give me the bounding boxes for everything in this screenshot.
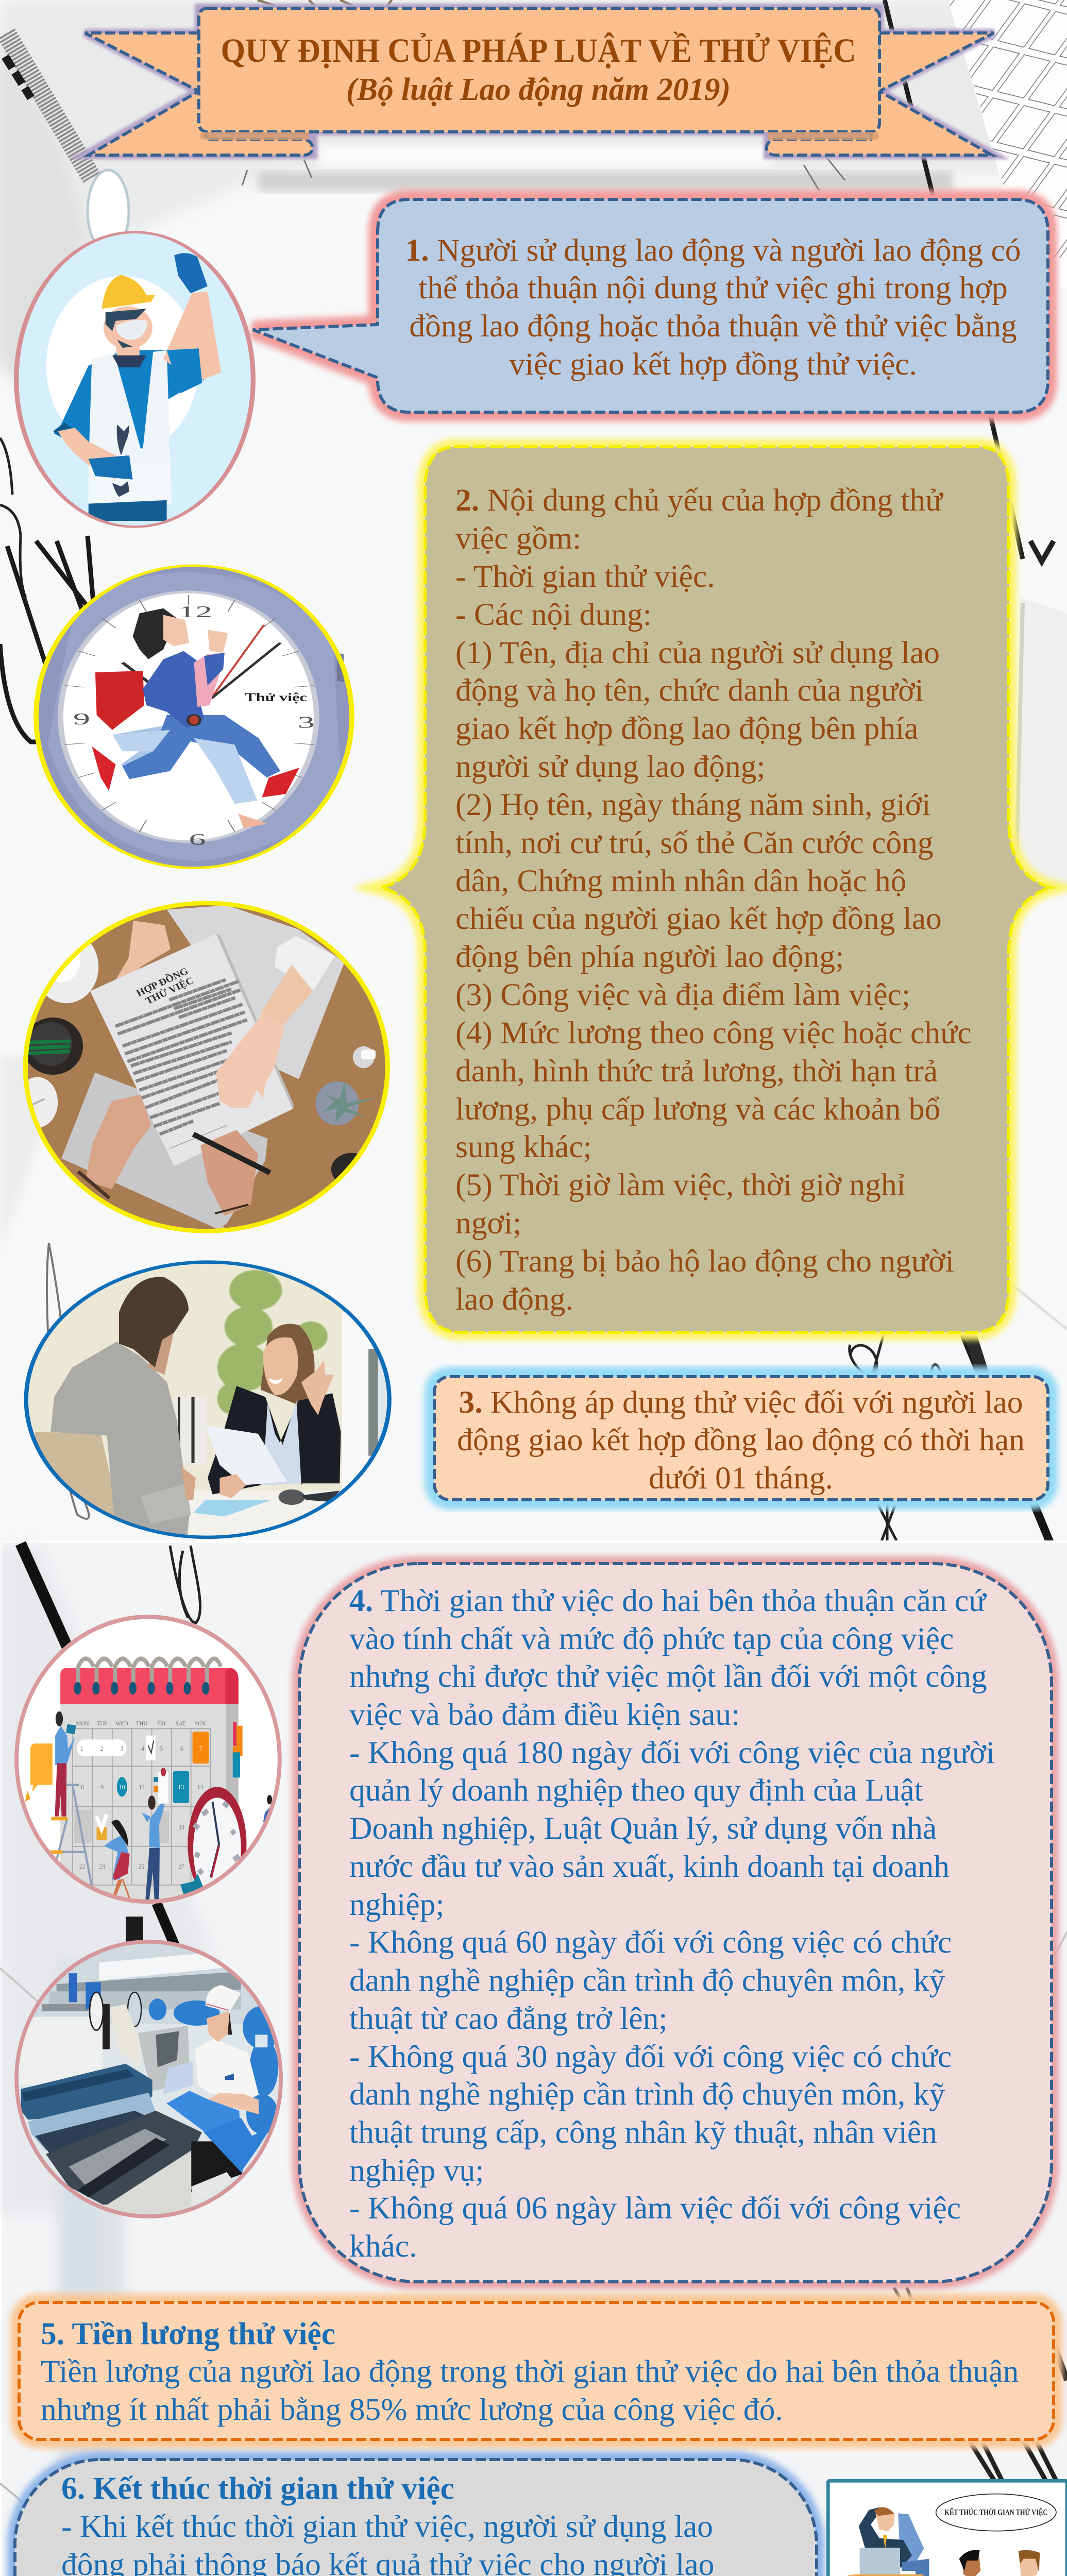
- top hand: [113, 921, 171, 989]
- panel 4 text: 4. Thời gian thử việc do hai bên thỏa thuận căn cứ: [349, 1583, 987, 1618]
- panel 2: contract contents: chiếu của người giao kết hợp đồng lao: [455, 901, 942, 936]
- jacket: [143, 651, 204, 728]
- panel 4: probation period: danh nghề nghiệp cần trình độ chuyên môn, kỹ: [349, 2077, 945, 2112]
- panel 4: probation period: nghiệp vụ;: [349, 2153, 484, 2188]
- panel 2: contract contents: (4) Mức lương theo công việc hoặc chức: [455, 1015, 972, 1050]
- stressed manager: [898, 2513, 924, 2569]
- panel 1: callout: việc giao kết hợp đồng thử việc.: [509, 347, 917, 382]
- mask: [116, 320, 148, 340]
- operator face: [207, 2011, 231, 2042]
- image: calendar illustration: 7: [199, 1744, 202, 1752]
- panel 2: contract contents: sung khác;: [455, 1129, 592, 1164]
- far person: [263, 1807, 274, 1822]
- image: calendar illustration: 9: [100, 1783, 104, 1791]
- image: running woman on clock: 3: [298, 714, 315, 732]
- panel 5 text: Tiền lương của người lao động trong thời gian thử việc do hai bên thỏa thuận: [41, 2354, 1019, 2389]
- panel 1: callout: [253, 199, 1048, 412]
- saucer and coffee: [34, 930, 98, 1003]
- calendar grid: [73, 1728, 211, 1885]
- panel 2: contract contents: lương, phụ cấp lương và các khoản bổ: [455, 1092, 940, 1127]
- plaque body: [381, 447, 1051, 1332]
- callout body: [253, 199, 1048, 412]
- neck: [116, 346, 140, 355]
- banner glow: [85, 8, 994, 155]
- panel 2: contract contents: động bên phía người lao động;: [455, 939, 844, 974]
- panel 4: probation period: vào tính chất và mức độ phức tạp của công việc: [349, 1621, 954, 1656]
- panel 2: contract contents: - Thời gian thử việc.: [455, 559, 715, 594]
- face: [104, 307, 153, 349]
- image: calendar illustration: 10: [119, 1783, 125, 1791]
- man neck and head: [148, 1331, 174, 1375]
- panel 2: contract contents: - Các nội dung:: [455, 597, 652, 632]
- title banner: [85, 8, 994, 155]
- panel 3 body: [434, 1377, 1048, 1500]
- title text: QUY ĐỊNH CỦA PHÁP LUẬT VỀ THỬ VIỆC: [221, 31, 856, 70]
- panel 5 glow: [19, 2302, 1054, 2439]
- clock numerals: 12: [178, 603, 212, 621]
- black cup with green pens: [23, 1018, 83, 1075]
- handbag: [95, 671, 144, 730]
- torso: [53, 348, 204, 448]
- panel 2: contract contents: lao động.: [455, 1282, 573, 1317]
- chair: [35, 1432, 119, 1546]
- helmet: [102, 275, 155, 309]
- image: calendar illustration: 1: [80, 1744, 83, 1752]
- plant pot: [316, 1081, 359, 1125]
- wall clock: [188, 1787, 247, 1901]
- operator shirt: [195, 2038, 259, 2100]
- desk: [838, 2574, 924, 2576]
- panel 5: probation salary: [19, 2302, 1054, 2439]
- image: calendar illustration: 13: [178, 1783, 184, 1791]
- shirt: [261, 1401, 301, 1485]
- panel 4: probation period: thuật từ cao đẳng trở lên;: [349, 2001, 667, 2036]
- panel 2: contract contents: (1) Tên, địa chỉ của người sử dụng lao: [455, 635, 940, 670]
- panel 6: end of probation: [15, 2460, 817, 2576]
- panel 3: dưới 01 tháng.: [649, 1461, 833, 1496]
- weekday labels: SUN: [195, 1721, 206, 1727]
- calendar sheet: [60, 1704, 239, 1901]
- right hand: [216, 1013, 284, 1108]
- panel 4: probation period: Doanh nghiệp, Luật Quản lý, sử dụng vốn nhà: [349, 1811, 937, 1846]
- panel 3 glow: [434, 1377, 1048, 1500]
- writing hand: [200, 1130, 258, 1216]
- machine bed: [46, 2111, 202, 2205]
- image box: employer responsibility: [828, 2481, 1067, 2576]
- panel 2: contract contents: ngơi;: [455, 1206, 521, 1241]
- panel 2: contract contents: (6) Trang bị bảo hộ lao động cho người: [455, 1244, 954, 1279]
- hand: [208, 630, 228, 653]
- paper: [206, 1426, 287, 1485]
- panel 2: contract contents: động và họ tên, chức danh của người: [455, 673, 924, 708]
- image: calendar illustration: 11: [139, 1783, 145, 1791]
- plaque glow: [381, 447, 1051, 1332]
- panel 4: probation period: nhưng chỉ được thử việc một lần đối với một công: [349, 1659, 987, 1694]
- panel 4: probation period: - Không quá 30 ngày đối với công việc có chức: [349, 2039, 952, 2074]
- image: calendar illustration: 27: [178, 1863, 184, 1871]
- raised arm: [163, 292, 221, 383]
- man on ladder: [55, 1726, 75, 1765]
- panel 1: callout: thể thỏa thuận nội dung thử việc ghi trong hợp: [418, 270, 1008, 306]
- panel 5: probation salary: nhưng ít nhất phải bằng 85% mức lương của công việc đó.: [41, 2392, 783, 2427]
- leaves: [180, 1874, 204, 1895]
- date cells: [77, 1739, 127, 1756]
- spools and machine: [90, 1992, 103, 2030]
- note on wall: [158, 1772, 168, 1804]
- panel 2: contract contents: (5) Thời giờ làm việc, thời giờ nghỉ: [455, 1167, 906, 1202]
- laptop: [860, 2548, 900, 2576]
- panel 2: contract contents: (3) Công việc và địa điểm làm việc;: [455, 977, 910, 1012]
- image: garment factory: [10, 1937, 289, 2216]
- forearm: [58, 428, 117, 480]
- panel 4: probation period: việc và bảo đảm điều kiện sau:: [349, 1697, 740, 1732]
- background folder: [167, 905, 344, 1079]
- blue fabric: [166, 2091, 243, 2172]
- image: contract signing: THỬ VIỆC: [144, 975, 196, 1007]
- binders: [902, 2559, 929, 2576]
- clock hands: [211, 625, 264, 699]
- panel 4: probation period: quản lý doanh nghiệp theo quy định của Luật: [349, 1773, 923, 1808]
- weekday labels: WED: [115, 1721, 128, 1727]
- panel 2: contract contents: (2) Họ tên, ngày tháng năm sinh, giới: [455, 787, 930, 822]
- speech ellipse: [936, 2494, 1056, 2531]
- right ribbon tail: [767, 33, 994, 155]
- weekday labels: SAT: [176, 1721, 185, 1727]
- dark cup right: [331, 1153, 372, 1186]
- image: worker illustration: [16, 232, 253, 527]
- hand: [208, 2093, 259, 2114]
- panel 6 heading: 6. Kết thúc thời gian thử việc: [61, 2471, 454, 2506]
- image: calendar illustration: 6: [180, 1744, 183, 1752]
- calendar header: [60, 1668, 239, 1704]
- hair and face: [133, 608, 177, 659]
- weekday labels: FRI: [157, 1721, 166, 1727]
- panel 4: probation period: nước đầu tư vào sản xuất, kinh doanh tại doanh: [349, 1849, 950, 1884]
- panel 3 text: 3. Không áp dụng thử việc đối với người lao: [459, 1385, 1023, 1420]
- image: calendar illustration: 5: [160, 1744, 163, 1752]
- Thử việc caption: Thử việc: [245, 691, 307, 704]
- image: interview scene: [21, 1257, 397, 1546]
- face: [263, 1337, 298, 1395]
- callout glow: [253, 199, 1048, 412]
- banner main ribbon: [199, 8, 879, 132]
- small bottle: [353, 1046, 375, 1068]
- paper text blocks: [115, 980, 247, 1134]
- panel 4: probation period: khác.: [349, 2229, 417, 2264]
- image: running woman on clock: 6: [189, 831, 206, 849]
- panel 2: contract contents: [381, 447, 1051, 1332]
- glove: [174, 253, 208, 293]
- image: calendar illustration: 14: [197, 1783, 203, 1791]
- image: calendar illustration: 4: [141, 1744, 144, 1752]
- panel 2: contract contents: người sử dụng lao động;: [455, 749, 765, 784]
- callout text: 1. Người sử dụng lao động và người lao động có: [405, 233, 1021, 268]
- panel 4: probation period: - Không quá 60 ngày đối với công việc có chức: [349, 1925, 952, 1960]
- image: running woman on clock: [36, 566, 352, 868]
- image: calendar illustration: 23: [99, 1863, 105, 1871]
- weekday labels: [76, 1721, 206, 1727]
- panel 3: [434, 1377, 1048, 1500]
- panel 4: probation period: nghiệp;: [349, 1887, 444, 1922]
- man shirt: [50, 1342, 190, 1546]
- image: calendar illustration: 25: [139, 1863, 144, 1871]
- panel 2: contract contents: giao kết hợp đồng lao động bên phía: [455, 711, 918, 746]
- blue garments piles: [149, 1998, 282, 2134]
- panel 3: động giao kết hợp đồng lao động có thời hạn: [457, 1422, 1025, 1458]
- weekday labels: THU: [136, 1721, 147, 1727]
- weekday labels: MON: [76, 1721, 89, 1727]
- desk: [189, 1485, 397, 1546]
- clock ticks: [64, 595, 314, 832]
- left ribbon tail: [85, 33, 312, 155]
- panel 4: probation period: thuật trung cấp, công nhân kỹ thuật, nhân viên: [349, 2115, 937, 2150]
- image: calendar illustration: 20: [178, 1823, 184, 1831]
- woman: [104, 1834, 129, 1879]
- binders: [174, 1396, 207, 1465]
- panel 5 heading: 5. Tiền lương thử việc: [41, 2316, 335, 2351]
- panel 2: contract contents: tính, nơi cư trú, số thẻ Căn cước công: [455, 825, 934, 860]
- panel 2: contract contents: việc gồm:: [455, 521, 581, 556]
- panel 5 body: [19, 2302, 1054, 2439]
- panel 2: contract contents: dân, Chứng minh nhân dân hoặc hộ: [455, 863, 906, 899]
- document title: HỢP ĐỒNG: [134, 965, 190, 999]
- calendar rings: [78, 1659, 221, 1686]
- wrench: [117, 425, 129, 455]
- background: upper section with desk items: [0, 0, 1067, 1544]
- panel 6 body: [15, 2460, 817, 2576]
- red shoes: [92, 747, 116, 791]
- white lid cup: [17, 1077, 58, 1128]
- contract paper: [90, 934, 293, 1166]
- panel 4: probation period: danh nghề nghiệp cần trình độ chuyên môn, kỹ: [349, 1963, 945, 1998]
- weekday labels: TUE: [97, 1721, 108, 1727]
- side tabs: [233, 1722, 236, 1746]
- image: running woman on clock: 9: [73, 710, 90, 728]
- panel 4: probation period: - Không quá 180 ngày đối với công việc của người: [349, 1735, 995, 1770]
- panel 4: probation period: - Không quá 06 ngày làm việc đối với công việc: [349, 2191, 961, 2226]
- image: contract signing: [17, 903, 387, 1231]
- image: calendar illustration: 2: [100, 1744, 103, 1752]
- factory hall: [10, 1937, 289, 2024]
- white cap: [206, 1985, 241, 2012]
- image: calendar illustration: 22: [79, 1863, 85, 1871]
- plaque text: 2. Nội dung chủ yếu của hợp đồng thử: [455, 483, 943, 518]
- lower folder: [61, 1073, 267, 1231]
- panel 6 text: - Khi kết thúc thời gian thử việc, người sử dụng lao: [61, 2509, 713, 2544]
- panel 4: probation period: [299, 1564, 1052, 2282]
- panel 4 body: [299, 1564, 1052, 2282]
- panel 2: contract contents: danh, hình thức trả lương, thời hạn trả: [455, 1054, 938, 1089]
- panel 6 glow: [15, 2460, 817, 2576]
- background: lower section with pen and papers: [0, 1540, 1067, 2576]
- woman legs: [112, 723, 197, 779]
- banner folds: [200, 132, 879, 140]
- speech bubble: [30, 1743, 53, 1792]
- woman jacket: [208, 1386, 341, 1495]
- left hand: [86, 1095, 151, 1189]
- blue machine cover: [21, 2064, 153, 2120]
- plant: [217, 1270, 328, 1414]
- ladder: [49, 1785, 92, 1887]
- signature line: [170, 1125, 227, 1148]
- panel 4 glow: [299, 1564, 1052, 2282]
- image: calendar illustration: [16, 1617, 280, 1902]
- subtitle: (Bộ luật Lao động năm 2019): [346, 72, 731, 107]
- image: calendar illustration: 3: [121, 1744, 123, 1752]
- raised hand: [301, 1360, 334, 1415]
- standing man: [142, 1795, 166, 1848]
- panel 1: callout: đồng lao động hoặc thỏa thuận về thử việc bằng: [409, 309, 1017, 344]
- woman hair back: [261, 1324, 316, 1485]
- image: calendar illustration: 8: [81, 1783, 84, 1791]
